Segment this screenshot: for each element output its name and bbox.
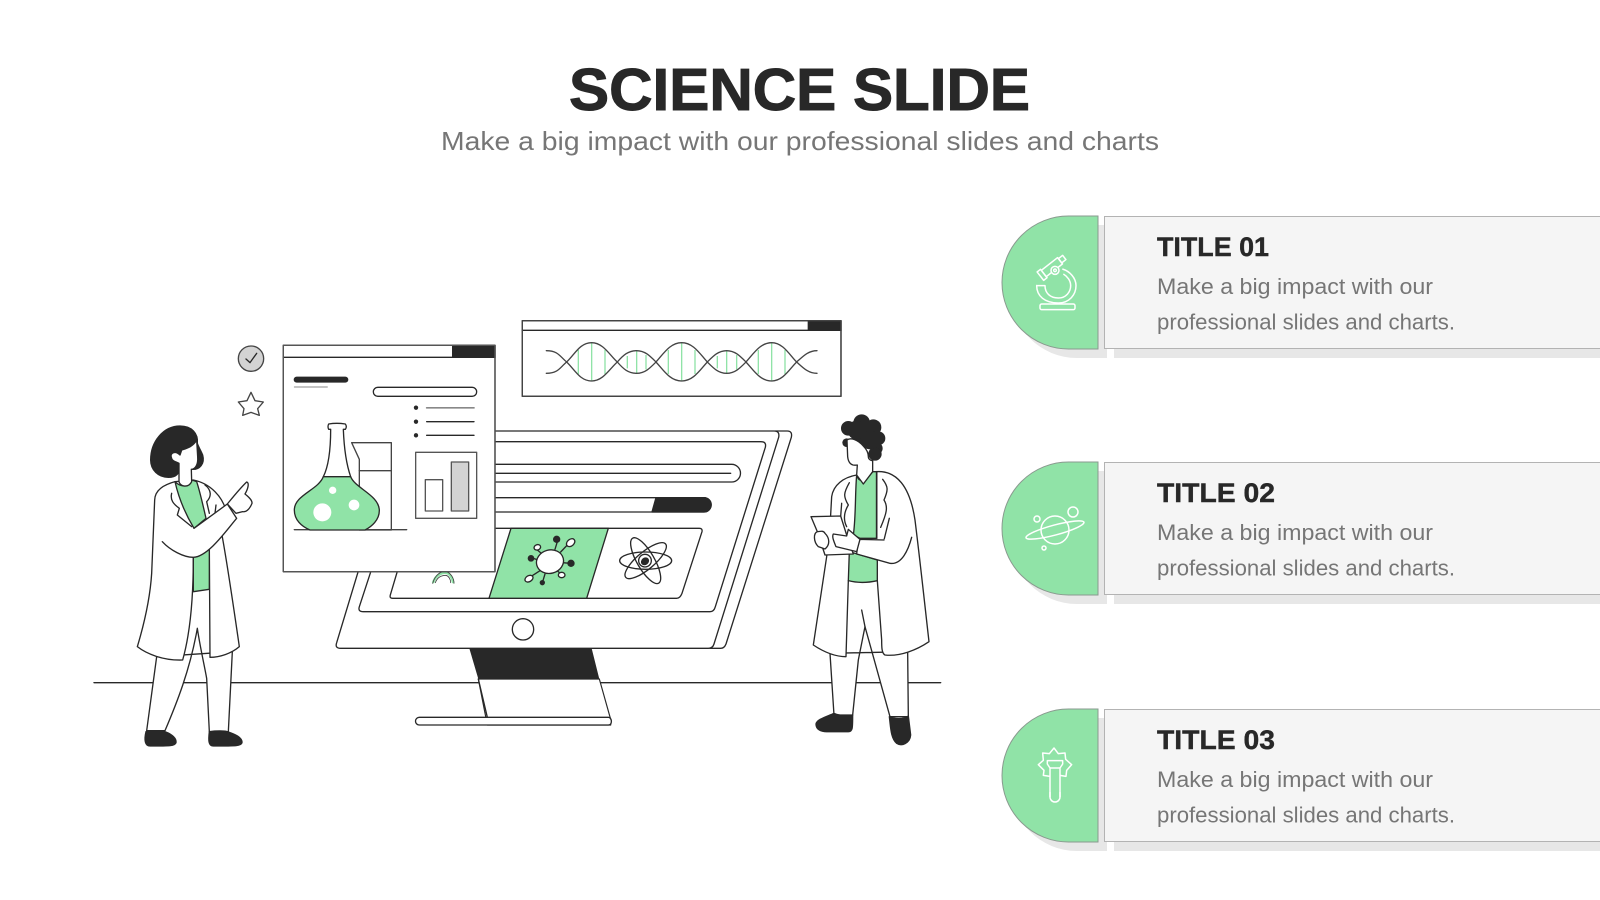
- person: man scientist: [811, 414, 929, 745]
- heading bar: [294, 377, 348, 382]
- window: DNA: [522, 321, 841, 396]
- icon: atom: [620, 534, 672, 588]
- window: lab report: [283, 345, 495, 572]
- dna strands: [546, 343, 817, 381]
- shirt: [175, 480, 209, 592]
- flask: [294, 423, 379, 530]
- icon: microscope: [1036, 253, 1076, 310]
- text panel: [1104, 710, 1600, 842]
- card body: professional slides and charts.: [1157, 802, 1455, 828]
- hands: [814, 529, 860, 552]
- monitor stand: [478, 679, 611, 725]
- card body: Make a big impact with our: [1157, 520, 1433, 545]
- tile row: [390, 528, 702, 598]
- sleeve: [162, 504, 237, 557]
- icon: star: [238, 392, 263, 415]
- card 1: [1002, 216, 1600, 358]
- head: [841, 414, 885, 484]
- coat: [813, 472, 929, 657]
- lapels: [171, 485, 216, 527]
- lapels: [841, 479, 889, 540]
- beaker: [352, 443, 391, 530]
- bar chart: [416, 452, 477, 518]
- icon: planet: [1025, 507, 1085, 550]
- card title: TITLE 02: [1157, 478, 1275, 508]
- card body: Make a big impact with our: [1157, 274, 1433, 299]
- tablet: [811, 516, 853, 555]
- card title: TITLE 01: [1157, 232, 1269, 262]
- card body: professional slides and charts.: [1157, 556, 1455, 580]
- icon tab: [1002, 216, 1098, 349]
- hand: [227, 482, 252, 513]
- icon: check badge: [238, 346, 264, 371]
- bullet list: [414, 405, 474, 437]
- monitor: [336, 431, 792, 725]
- sleeve: [857, 537, 912, 563]
- icon: virus: [524, 536, 576, 585]
- card body: Make a big impact with our: [1157, 767, 1433, 792]
- text panel: [1104, 462, 1600, 594]
- card body: professional slides and charts.: [1157, 310, 1455, 334]
- card 2: [1002, 462, 1600, 604]
- progress bar: [463, 498, 711, 512]
- dna rungs: [578, 343, 785, 381]
- text panel: [1104, 216, 1600, 348]
- card title: TITLE 03: [1157, 725, 1275, 755]
- icon: test tube: [1038, 748, 1072, 802]
- icon tab: [1002, 462, 1098, 595]
- trousers: [830, 627, 908, 717]
- card 3: [1002, 709, 1600, 851]
- trousers: [147, 628, 232, 732]
- icon tab: [1002, 709, 1098, 842]
- search bar: [463, 464, 740, 482]
- power button: [512, 619, 534, 640]
- shoes: [816, 713, 911, 745]
- shirt: [848, 472, 877, 582]
- head: [151, 426, 203, 477]
- subtitle: Make a big impact with our professional slides and charts: [441, 126, 1159, 156]
- coat: [137, 480, 239, 660]
- illustration: [94, 321, 941, 746]
- title: SCIENCE SLIDE: [569, 57, 1030, 123]
- green fragment icon: [433, 572, 454, 583]
- shoes: [145, 731, 242, 746]
- person: woman scientist: [137, 426, 252, 746]
